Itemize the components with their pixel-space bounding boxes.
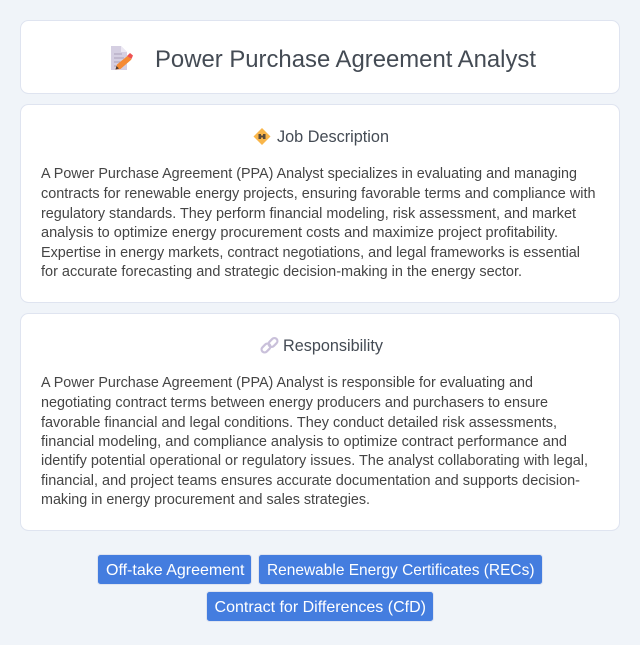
icon: chain link [260,337,279,354]
icon: diamond sign [254,128,270,145]
heading: responsibility: Responsibility [283,337,384,355]
text block: job description: Expertise in energy markets, contract negotiations, and legal frameworks is essential [41,245,580,261]
text block: responsibility: financial, and project teams ensures accurate documentation and supports decision- [41,473,580,489]
tag: off-take agreement [98,554,252,584]
text block: responsibility: A Power Purchase Agreement (PPA) Analyst is responsible for evaluating and [41,375,533,391]
panel: title card [20,20,620,94]
text block: job description: A Power Purchase Agreement (PPA) Analyst specializes in evaluating and managing [41,166,577,182]
tag: contract for differences: Contract for Differences (CfD) [214,599,426,616]
panel: job description [20,104,620,302]
heading: job description: Job Description [277,128,389,146]
text block: responsibility: identify potential operational or regulatory issues. The analyst collaborating with legal, [41,453,588,469]
text block: responsibility: financial modeling, and compliance analysis to optimize contract performance and [41,434,567,450]
icon: document with pencil [111,46,133,70]
title: Power Purchase Agreement Analyst [155,46,536,73]
text block: job description: regulatory standards. They perform financial modeling, risk assessment, and market [41,206,576,222]
text block: responsibility: negotiating contract terms between energy producers and purchasers to ensure [41,395,548,411]
text block: job description: contracts for renewable energy projects, ensuring favorable terms and compliance with [41,186,596,202]
text block: responsibility: favorable financial and legal conditions. They conduct detailed risk assessments, [41,415,557,431]
tag: renewable energy certificates [258,554,542,584]
text block: job description: for accurate forecasting and strategic decision-making in the energy sector. [41,264,522,280]
text block: job description: analysis to optimize energy procurement costs and maximize project profitability. [41,225,558,241]
panel: responsibility [20,314,620,530]
text block: responsibility: making in energy procurement and sales strategies. [41,492,370,508]
text block: responsibility [41,375,588,508]
tag: renewable energy certificates: Renewable Energy Certificates (RECs) [267,562,534,579]
tag: off-take agreement: Off-take Agreement [106,562,245,579]
tag: contract for differences [206,592,434,622]
text block: job description [41,166,596,280]
